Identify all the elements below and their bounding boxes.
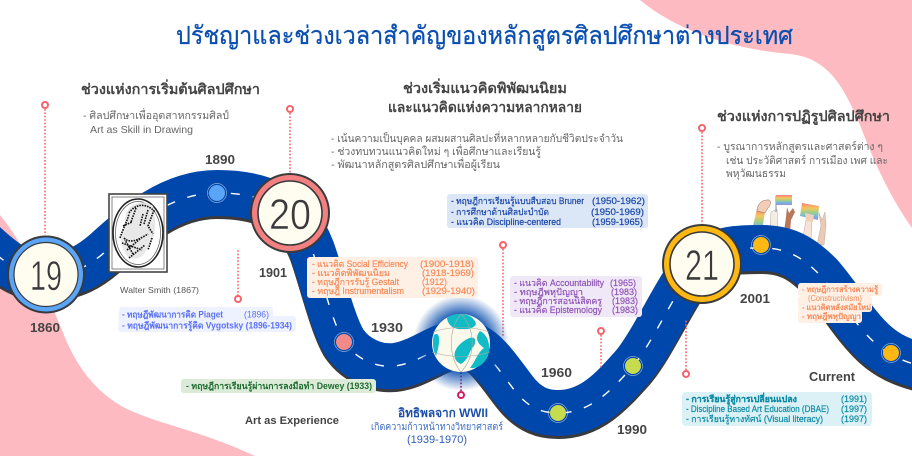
year labels: 1890	[205, 152, 235, 167]
callout: Social Efficiency group: (1918-1969)	[422, 268, 474, 278]
section 1: beginning of art education	[81, 79, 260, 136]
milestone circle: 19: 19	[30, 252, 62, 299]
callout: Bruner group: (1950-1969)	[591, 207, 644, 217]
section 2: progressivism and diversity: - พัฒนาหลักสูตรศิลปศึกษาเพื่อผู้เรียน	[331, 157, 500, 171]
milestone circle: 20: 20	[269, 191, 311, 239]
callout: Social Efficiency group: (1900-1918)	[420, 259, 474, 269]
section 2: progressivism and diversity: - ช่วงทบทวนแนวคิดใหม่ ๆ เพื่อศึกษาและเรียนรู้	[331, 144, 541, 158]
callout: Constructivism group: - ทฤษฎีพหุปัญญา	[802, 311, 861, 322]
callout: Bruner group: - ทฤษฎีการเรียนรู้แบบสืบสอบ Bruner	[451, 196, 584, 207]
label: Art as Experience: Art as Experience	[245, 415, 339, 427]
callout: Dewey	[181, 379, 376, 393]
callout: WWII influence: (1939-1970)	[407, 434, 467, 446]
callout: Bruner group: - การศึกษาด้านศิลปะบำบัด	[451, 207, 549, 217]
portrait: Walter Smith	[109, 194, 167, 272]
pin lines	[42, 102, 705, 398]
road stops	[208, 184, 900, 422]
background shape: bottom left pink	[0, 215, 255, 456]
callout: Accountability group: (1965)	[610, 278, 636, 288]
callout: Bruner group: (1959-1965)	[592, 217, 643, 227]
road	[0, 193, 912, 416]
year labels: Current	[809, 369, 856, 384]
section 3: art education reform: เช่น ประวัติศาสตร์ การเมือง เพศ และ	[726, 154, 888, 167]
callout: WWII influence: อิทธิพลจาก WWII	[398, 406, 488, 420]
callout: transformative learning group: - การเรียนรู้สู่การเปลี่ยนแปลง	[686, 392, 797, 405]
callout: Constructivism group	[798, 283, 882, 323]
illustration: raised hands with rainbow flags	[752, 195, 826, 245]
callout: Piaget and Vygotsky	[118, 307, 296, 332]
section 3: art education reform: - บูรณาการหลักสูตรและศาสตร์ต่าง ๆ	[717, 140, 883, 153]
callout: transformative learning group: (1991)	[841, 394, 867, 404]
callout: Accountability group: - แนวคิด Accountability	[514, 278, 604, 288]
callout: Accountability group: (1983)	[612, 305, 638, 315]
callout: Accountability group: - แนวคิด Epistemology	[514, 305, 602, 315]
year labels	[30, 152, 856, 437]
callout: Accountability group: (1983)	[612, 296, 638, 306]
callout: Accountability group: - ทฤษฎีพหุปัญญา	[514, 287, 583, 298]
callout: Accountability group: (1983)	[611, 287, 637, 297]
section 3: art education reform: ช่วงแห่งการปฏิรูปศิลปศึกษา	[717, 108, 890, 125]
milestone circle: 20	[250, 173, 330, 253]
callout: Social Efficiency group: (1912)	[422, 277, 447, 287]
callout: Social Efficiency group: (1929-1940)	[422, 286, 475, 296]
callout: Social Efficiency group: - แนวคิดพิพัฒนนิยม	[312, 268, 390, 278]
label: Walter Smith: Walter Smith (1867)	[120, 285, 199, 295]
title: ปรัชญาและช่วงเวลาสำคัญของหลักสูตรศิลปศึกษาต่างประเทศ	[176, 22, 793, 51]
callout: transformative learning group: (1997)	[841, 414, 867, 424]
callout: Piaget and Vygotsky: (1896)	[244, 310, 269, 320]
callout: Constructivism group: (Constructivism)	[808, 294, 862, 303]
callout: Constructivism group: - ทฤษฎีการสร้างความรู้	[802, 284, 879, 295]
section 2: progressivism and diversity: ช่วงเริ่มแนวคิดพิพัฒนนิยม	[403, 78, 567, 96]
year labels: 1901	[259, 265, 287, 280]
callout: transformative learning group: (1997)	[841, 404, 867, 414]
callout: Bruner group	[447, 194, 648, 228]
background shape: top right pink	[640, 0, 912, 228]
callout: WWII influence: เกิดความก้าวหน้าทางวิทยาศาสตร์	[371, 421, 504, 433]
section 1: beginning of art education: Art as Skill in Drawing	[90, 124, 193, 136]
callout: Accountability group	[510, 276, 642, 317]
callout: Social Efficiency group	[307, 257, 478, 298]
year labels: 1860	[30, 320, 60, 335]
globe	[413, 295, 509, 391]
milestone circle: 21	[662, 224, 742, 304]
section 3: art education reform: พหุวัฒนธรรม	[726, 168, 786, 180]
callout: transformative learning group: - Discipline Based Art Education (DBAE)	[686, 404, 829, 414]
callout: Social Efficiency group: - ทฤษฎีการรับรู้ Gestalt	[312, 277, 399, 288]
callout: transformative learning group: - การเรียนรู้ทางทัศน์ (Visual literacy)	[686, 413, 823, 425]
callout: Piaget and Vygotsky: - ทฤษฎีพัฒนาการคิด Piaget	[122, 310, 223, 320]
milestone circle: 19	[7, 236, 85, 314]
callout: transformative learning group	[682, 392, 872, 426]
section 2: progressivism and diversity: - เน้นความเป็นบุคคล ผสมผสานศิลปะที่หลากหลายกับชีวิตประจำวัน	[331, 131, 623, 145]
callout: Bruner group: (1950-1962)	[592, 196, 645, 206]
year labels: 2001	[740, 291, 770, 306]
section 3: art education reform	[717, 108, 890, 180]
section 2: progressivism and diversity	[331, 78, 623, 171]
section 2: progressivism and diversity: และแนวคิดแห่งความหลากหลาย	[388, 99, 582, 115]
callout: Constructivism group: - แนวคิดหลังสมัยใหม่	[802, 302, 871, 312]
callout: Social Efficiency group: - ทฤษฎี Instrumentalism	[312, 286, 404, 296]
callout: Accountability group: - ทฤษฎีการสอนนิสิตครู	[514, 296, 602, 307]
section 1: beginning of art education: ช่วงแห่งการเริ่มต้นศิลปศึกษา	[81, 79, 260, 97]
callout: Piaget and Vygotsky: - ทฤษฎีพัฒนาการรู้คิด Vygotsky (1896-1934)	[122, 320, 292, 332]
callout: Dewey: - ทฤษฎีการเรียนรู้ผ่านการลงมือทำ Dewey (1933)	[186, 380, 372, 392]
callout: Bruner group: - แนวคิด Discipline-centered	[451, 217, 561, 227]
section 1: beginning of art education: - ศิลปศึกษาเพื่ออุตสาหกรรมศิลป์	[83, 108, 229, 122]
callout: WWII influence	[371, 406, 504, 446]
year labels: 1930	[371, 320, 403, 335]
callout: Social Efficiency group: - แนวคิด Social Efficiency	[312, 259, 408, 269]
year labels: 1990	[617, 422, 647, 437]
milestone circle: 21: 21	[685, 242, 719, 290]
year labels: 1960	[541, 365, 572, 380]
